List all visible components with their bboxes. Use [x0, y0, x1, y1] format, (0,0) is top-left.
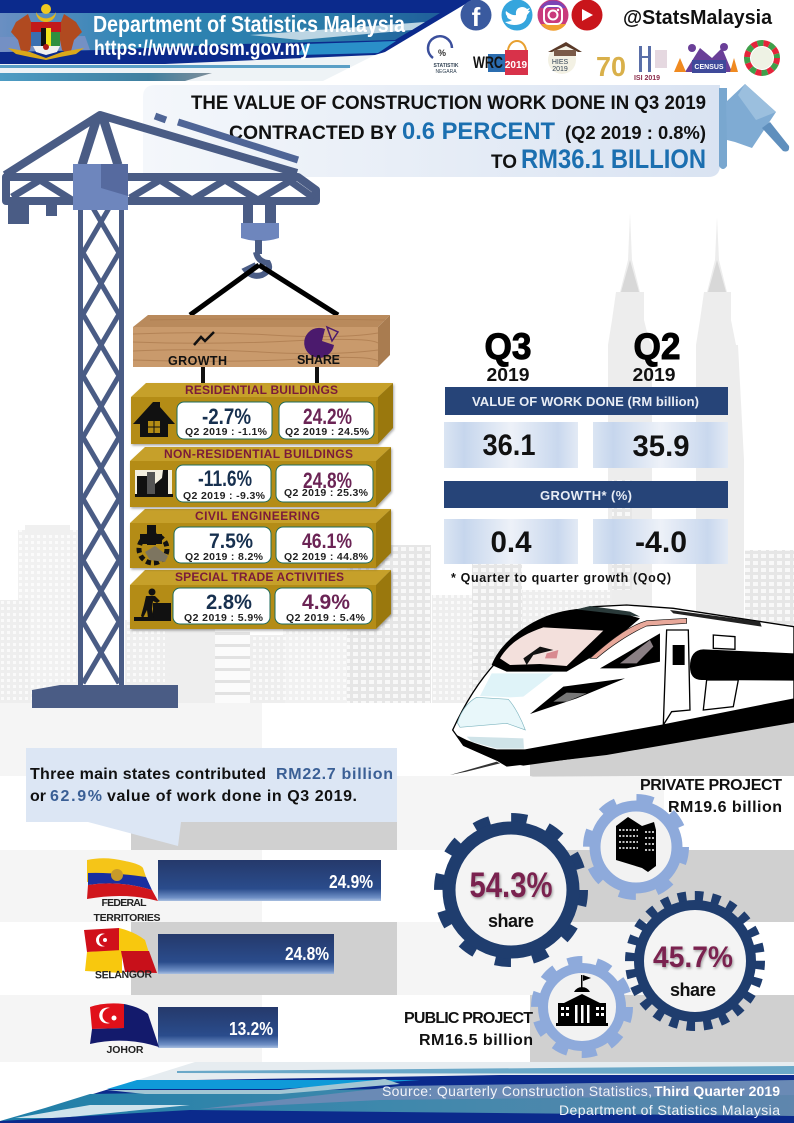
header banner — [0, 0, 472, 81]
logo: ISI 2019: ISI 2019 — [634, 75, 660, 82]
icon: instagram — [538, 0, 568, 31]
icon: office buildings — [616, 817, 656, 872]
logo: HIES — [548, 42, 582, 74]
bar: selangor: 24.8% — [285, 944, 329, 964]
operator cab — [73, 164, 128, 210]
counterweights — [8, 205, 57, 224]
title line 3: RM36.1 BILLION — [521, 144, 706, 174]
social handle: @StatsMalaysia — [623, 7, 773, 29]
heading: Q2 2019: 2019 — [632, 365, 676, 385]
title line 1: THE VALUE OF CONSTRUCTION WORK DONE IN Q3 2019 — [191, 93, 706, 114]
icon: factory — [135, 470, 173, 497]
value cell: Q3 — [444, 422, 578, 468]
sector title: NON-RESIDENTIAL BUILDINGS — [164, 447, 353, 461]
bar: selangor — [158, 934, 334, 974]
icon: house — [133, 402, 175, 437]
logo: 70 anniversary: 70 — [596, 51, 626, 82]
background stripes — [0, 703, 794, 1062]
footer banner — [0, 1062, 794, 1123]
gear: 45.7% share — [630, 896, 760, 1026]
logo: HIES: 2019 — [552, 66, 568, 73]
label: public project: PUBLIC PROJECT — [404, 1010, 533, 1027]
share card: Q2 2019 : 5.4% — [286, 612, 366, 624]
logo: statistics day: STATISTIK — [433, 63, 459, 69]
growth cell: Q2 — [593, 519, 728, 564]
share label: share — [670, 980, 716, 1000]
share card: Q2 2019 : 24.5% — [285, 426, 370, 438]
department line: Department of Statistics Malaysia — [559, 1102, 780, 1118]
icon: facebook — [460, 0, 492, 32]
header bar: growth: GROWTH* (%) — [540, 488, 632, 503]
callout line 1: Three main states contributed — [30, 766, 266, 783]
logo: census — [674, 43, 738, 73]
label: growth: GROWTH — [168, 354, 227, 368]
panel: non-residential buildings — [130, 447, 391, 507]
icon: twitter — [502, 0, 532, 30]
logo: WRC 2019: 2019 — [505, 60, 528, 71]
bar: johor — [158, 1007, 278, 1048]
icon: youtube — [572, 0, 602, 30]
growth cell: Q3: 0.4 — [490, 526, 532, 559]
growth card: Q2 2019 : -9.3% — [183, 490, 266, 502]
icon: gear and city — [139, 525, 168, 563]
train illustration — [450, 605, 794, 777]
crane mast — [80, 191, 122, 688]
label: private project — [640, 777, 782, 816]
share card: 4.9% — [302, 591, 350, 614]
flag: federal territories — [87, 858, 160, 924]
bar: federal territories — [158, 860, 381, 901]
growth card: Q2 2019 : -1.1% — [185, 426, 268, 438]
partner logos — [428, 36, 777, 82]
crane jib — [5, 115, 316, 201]
share card: Q2 2019 : 44.8% — [284, 551, 369, 563]
share card: 46.1% — [302, 530, 352, 553]
value cell: Q2 — [593, 422, 728, 468]
icon: government building — [556, 975, 608, 1026]
growth card: Q2 2019 : 5.9% — [184, 612, 264, 624]
growth card: Q2 2019 : 8.2% — [185, 551, 264, 563]
title line 2 — [229, 118, 706, 145]
icon: growth arrow — [194, 332, 214, 345]
share card — [276, 465, 373, 502]
growth card: -2.7% — [202, 404, 251, 429]
gear: 54.3% share — [439, 818, 583, 962]
share card — [279, 402, 374, 439]
sling ropes — [190, 265, 338, 315]
header bar: value of work done: VALUE OF WORK DONE (RM billion) — [472, 394, 699, 409]
title line 2: (Q2 2019 : 0.8%) — [565, 123, 706, 143]
hook assembly — [241, 205, 279, 276]
callout: three main states — [26, 748, 397, 846]
callout line 1 — [30, 766, 393, 783]
twin towers — [608, 213, 744, 705]
flag: federal territories: FEDERAL — [102, 897, 147, 909]
logo: HIES: HIES — [552, 59, 568, 66]
growth card: 7.5% — [209, 530, 253, 553]
value cell: Q2: 35.9 — [632, 430, 690, 463]
sector title: CIVIL ENGINEERING — [195, 509, 320, 523]
panel: special trade activities — [130, 570, 391, 629]
callout line 1: RM22.7 billion — [276, 766, 393, 783]
logo: SDG wheel — [747, 43, 777, 73]
logo: statistics day — [428, 36, 459, 75]
logo: statistics day: NEGARA — [435, 69, 457, 75]
source line: Third Quarter 2019 — [654, 1083, 780, 1099]
label: public project — [404, 1010, 533, 1049]
icon: worker — [134, 588, 171, 621]
header bar: growth — [444, 481, 728, 508]
share value: 45.7% — [653, 941, 733, 974]
header bar: value of work done — [445, 387, 728, 415]
panel: residential buildings — [131, 383, 393, 444]
source line: Source: Quarterly Construction Statistics, — [382, 1083, 652, 1099]
logo: WRC 2019: WRC — [473, 53, 503, 72]
title line 3: TO — [491, 152, 517, 173]
flag: selangor — [84, 928, 157, 981]
title line 2: CONTRACTED BY — [229, 123, 397, 144]
growth card — [177, 402, 272, 439]
callout line 2: or — [30, 788, 46, 805]
callout line 2: value of work done in Q3 2019. — [107, 788, 357, 805]
wooden beam — [133, 315, 390, 368]
callout line 2: 62.9% — [50, 788, 102, 805]
bar: federal territories: 24.9% — [329, 872, 373, 892]
title line 2: 0.6 PERCENT — [402, 118, 555, 145]
skyline background — [0, 213, 794, 705]
gear: private icon — [587, 798, 685, 896]
footnote: * Quarter to quarter growth (QoQ) — [451, 571, 671, 585]
share card: 24.8% — [303, 468, 352, 493]
growth card: -11.6% — [198, 466, 252, 491]
label: public project: RM16.5 billion — [419, 1032, 533, 1049]
source line — [382, 1083, 780, 1099]
website: https://www.dosm.gov.my — [94, 37, 310, 60]
panel: civil engineering — [130, 509, 391, 568]
social media icons — [460, 0, 602, 32]
heading: Q3 2019: Q3 — [484, 326, 532, 367]
sector title: SPECIAL TRADE ACTIVITIES — [175, 570, 344, 584]
label: private project: RM19.6 billion — [668, 799, 782, 816]
share card: 24.2% — [303, 404, 352, 429]
heading: Q3 2019: 2019 — [486, 365, 530, 385]
flag: johor: JOHOR — [106, 1044, 144, 1056]
growth card — [176, 465, 271, 502]
share card — [276, 527, 373, 563]
logo: WRC 2019 — [473, 41, 528, 75]
gear: public icon — [535, 960, 629, 1054]
bar: johor: 13.2% — [229, 1019, 273, 1039]
top strut bars — [155, 116, 298, 160]
department name: Department of Statistics Malaysia — [93, 11, 405, 37]
share label: share — [488, 911, 534, 931]
growth card — [173, 588, 270, 624]
logo: statistics day: % — [438, 48, 446, 58]
icon: coat of arms — [8, 4, 84, 60]
quarter comparison table — [444, 326, 728, 585]
sector title: RESIDENTIAL BUILDINGS — [185, 383, 338, 397]
value cell: Q3: 36.1 — [482, 429, 536, 462]
heading: Q3 2019 — [484, 326, 532, 385]
heading: Q2 2019 — [632, 326, 680, 385]
share value: 54.3% — [470, 866, 552, 905]
flag: selangor: SELANGOR — [95, 968, 153, 981]
growth cell: Q3 — [444, 519, 578, 564]
beam posts — [201, 367, 319, 383]
heading: Q2 2019: Q2 — [634, 326, 680, 367]
growth card: 2.8% — [206, 591, 252, 614]
share card — [275, 588, 372, 624]
icon: paint brush — [719, 84, 789, 169]
title panel — [143, 85, 720, 177]
icon: share pie — [304, 327, 338, 358]
share card: Q2 2019 : 25.3% — [284, 487, 369, 499]
label: share: SHARE — [297, 353, 340, 367]
growth cell: Q2: -4.0 — [635, 526, 687, 559]
logo: ISI 2019 — [634, 46, 667, 82]
bar chart: state shares — [158, 860, 381, 1048]
crane base — [32, 685, 178, 708]
logo: census: CENSUS — [694, 64, 724, 71]
flag: johor — [90, 1003, 159, 1056]
icon: facebook: f — [472, 2, 481, 32]
label: private project: PRIVATE PROJECT — [640, 777, 782, 794]
crane — [5, 115, 338, 708]
growth card — [174, 527, 271, 563]
flag: federal territories: TERRITORIES — [94, 912, 160, 924]
